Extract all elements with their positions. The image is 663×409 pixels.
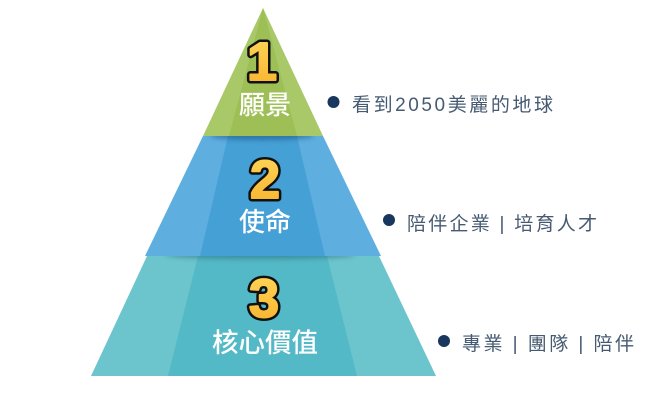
number 2: 2: [250, 150, 280, 210]
text: vision: 看到2050美麗的地球: [352, 94, 553, 116]
number 1: 1: [247, 32, 277, 92]
number 3: 3: [249, 269, 279, 329]
tier 3: core values: [91, 251, 436, 376]
tier 1: vision: [203, 8, 323, 136]
tier 2: mission: [145, 132, 381, 256]
heading: mission: 使命: [239, 207, 291, 237]
number 2: 2: [250, 150, 280, 210]
number 1: 1: [247, 32, 277, 92]
bullet: vision: [328, 96, 340, 108]
text: mission: 陪伴企業 | 培育人才: [407, 213, 597, 235]
bullet: mission: [383, 214, 395, 226]
number 3: 3: [249, 269, 279, 329]
text: core values: 專業 | 團隊 | 陪伴: [462, 333, 634, 355]
heading: core values: 核心價值: [212, 328, 318, 358]
bullet: core values: [438, 335, 450, 347]
heading: vision: 願景: [239, 90, 291, 120]
